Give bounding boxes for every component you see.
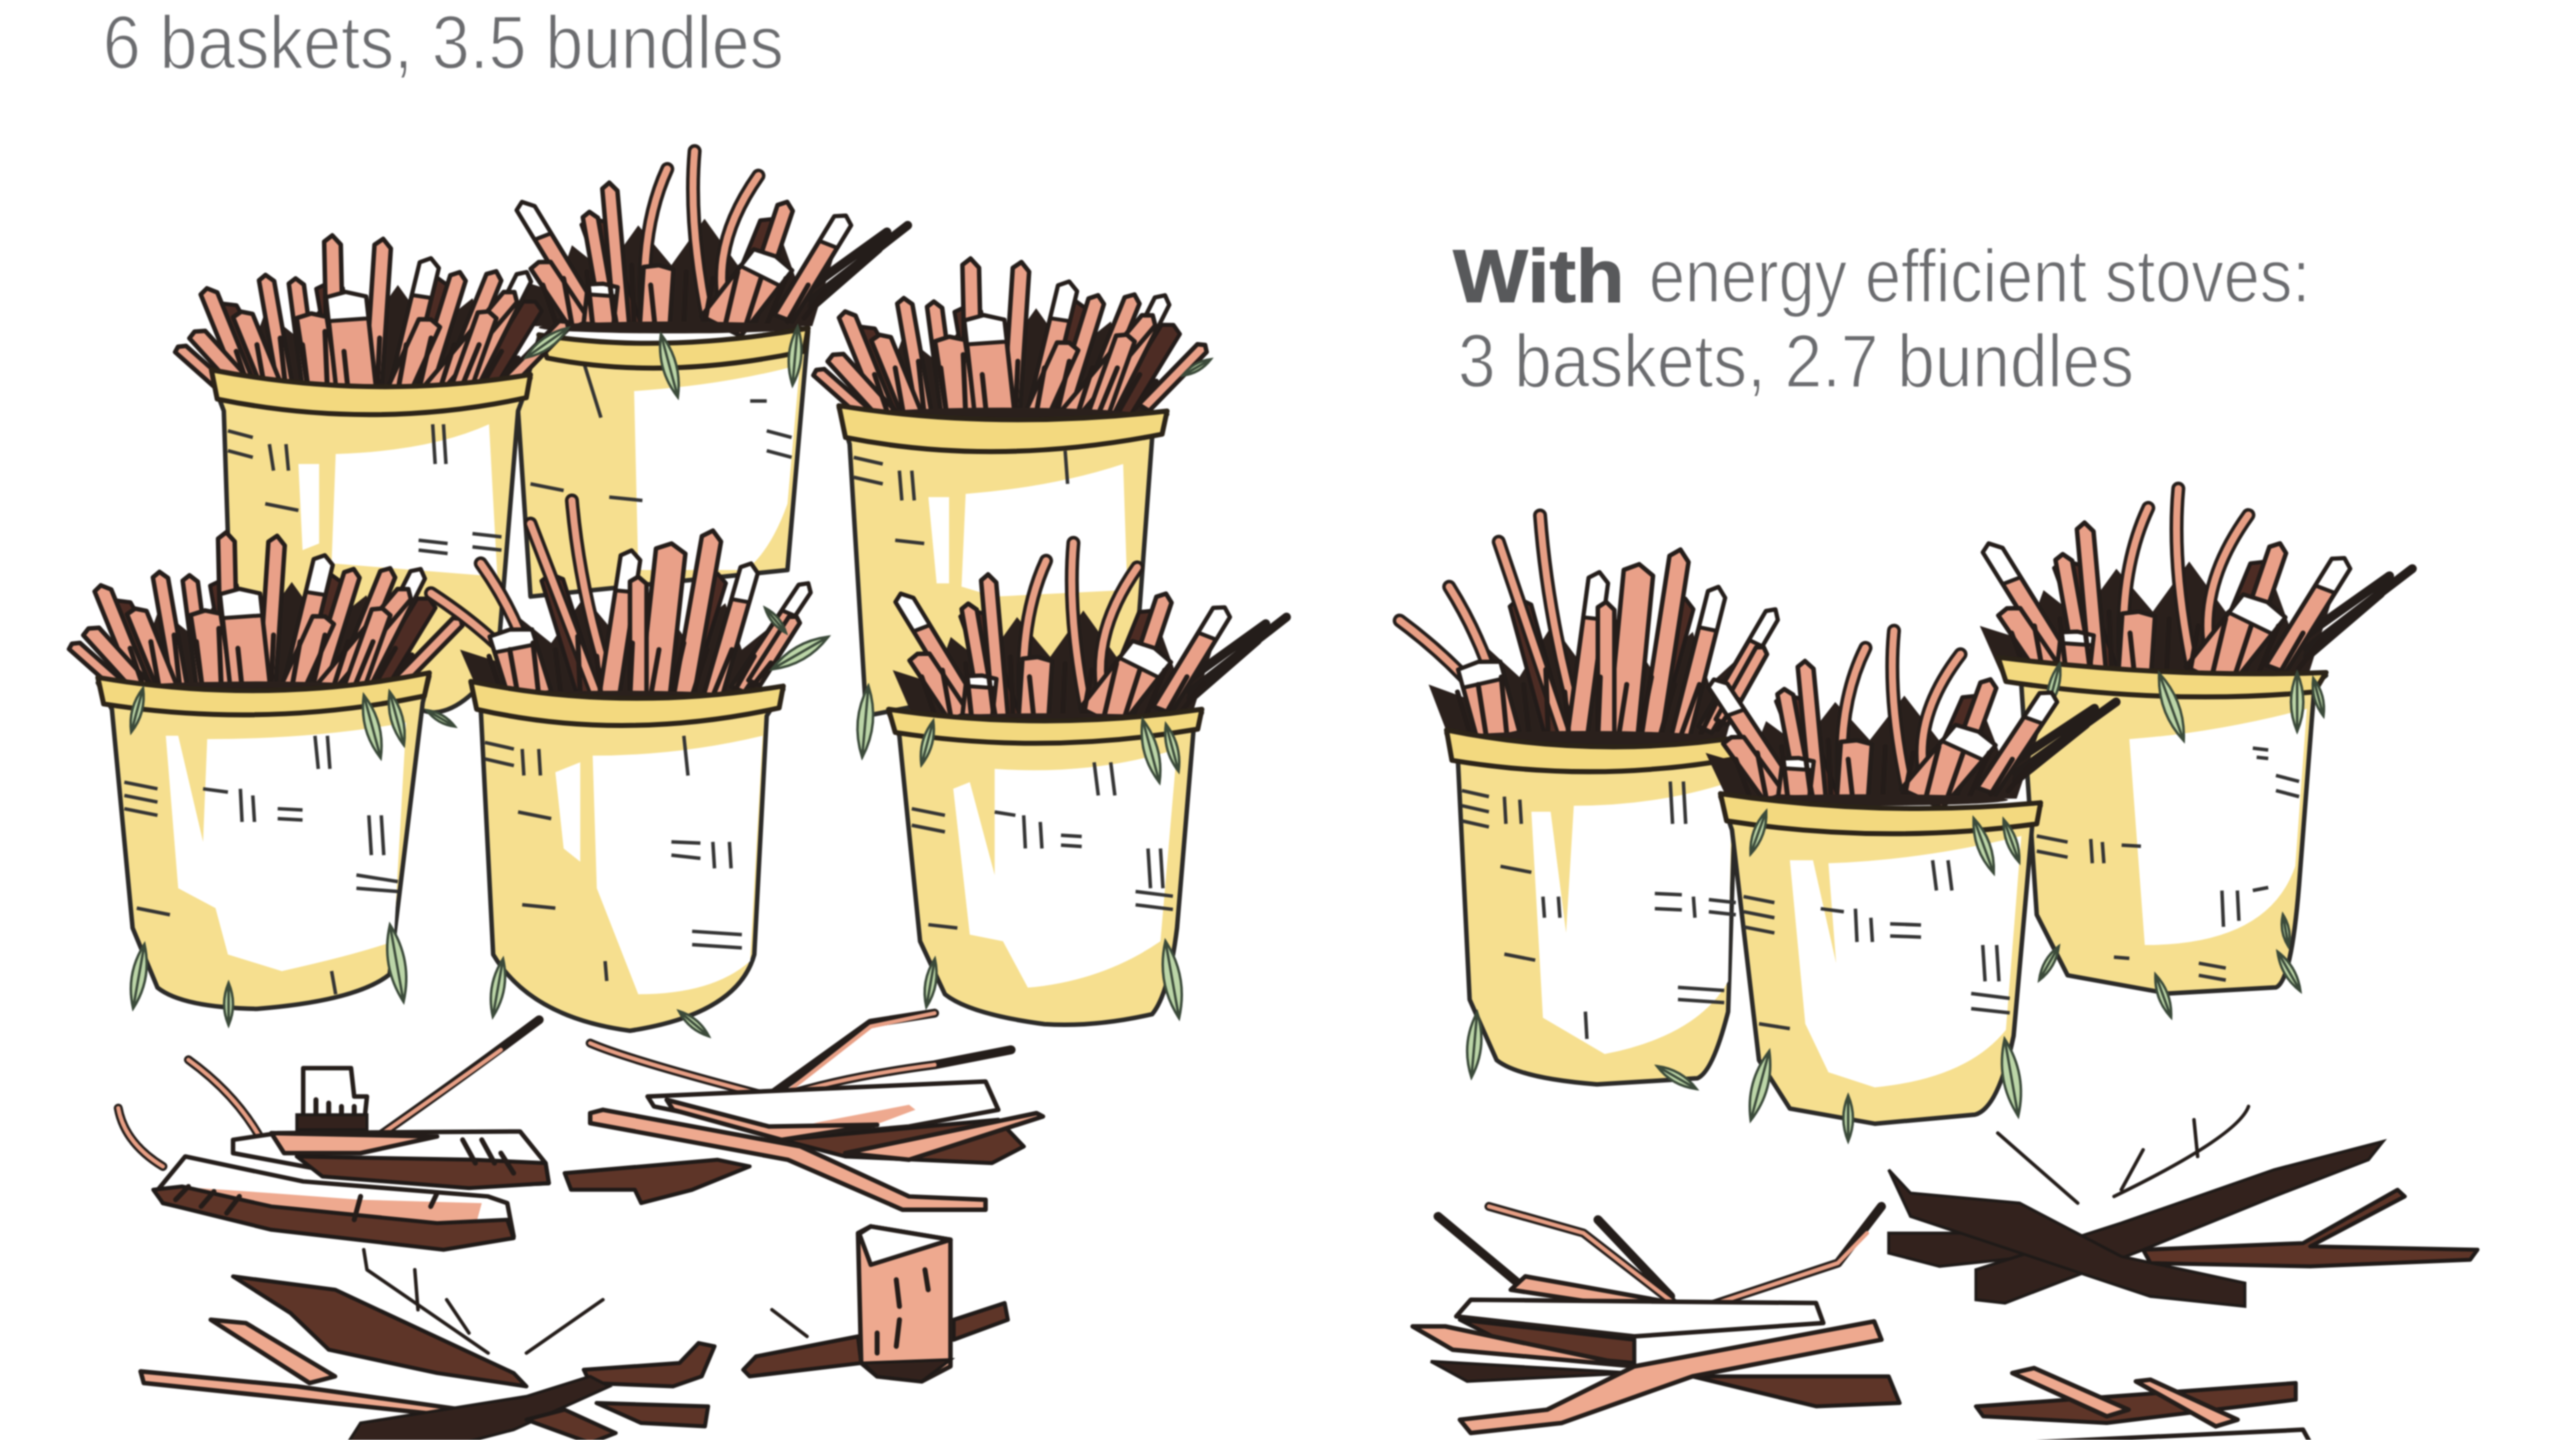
leaves: back right <box>2036 662 2327 1019</box>
basket: front left <box>67 532 466 1009</box>
basket: front centre <box>1705 631 2116 1124</box>
bundle: single split log with stick <box>743 1226 1008 1381</box>
bundle: crossed sticks on split log <box>565 1013 1043 1210</box>
bundle: dark crossed branches <box>141 1250 715 1440</box>
leaves: front left <box>126 687 457 1025</box>
basket: front left <box>1400 515 1782 1084</box>
leaf: back right <box>1181 356 1213 378</box>
basket: back right <box>811 258 1210 716</box>
bundle: partial sticks at bottom edge <box>1976 1368 2310 1440</box>
illustration: six baskets of firewood without efficient stoves <box>67 151 1286 1039</box>
text: right panel heading: energy efficient stoves: <box>1649 234 2310 318</box>
bundle: dark crossed branches <box>1889 1106 2477 1306</box>
leaf: back left <box>522 323 571 362</box>
leaves: front right <box>855 685 1187 1020</box>
basket: back centre <box>514 151 908 597</box>
leaves: front left <box>1465 1012 1699 1093</box>
text: right panel heading: 3 baskets, 2.7 bundles <box>1458 319 2134 403</box>
bundle: pale sticks on split log <box>1413 1206 1900 1433</box>
basket: front right <box>889 543 1286 1025</box>
illustration: three baskets of firewood with efficient stoves <box>1400 489 2412 1141</box>
basket: back right <box>1980 489 2412 993</box>
leaves: front centre <box>1743 810 2026 1141</box>
text: right panel heading: With <box>1453 234 1624 318</box>
text: left panel heading: 6 baskets, 3.5 bundles <box>103 1 784 85</box>
text: right panel heading <box>1453 234 2310 403</box>
leaf: back centre right <box>786 326 804 386</box>
basket: back left <box>173 235 572 713</box>
illustration: bundles, right <box>1413 1106 2477 1440</box>
illustration: three and a half bundles, left <box>118 1013 1043 1440</box>
bundle: logs with stump <box>118 1020 549 1250</box>
basket: front centre <box>431 500 815 1031</box>
leaf: back centre <box>654 332 684 399</box>
leaves: front centre <box>487 606 832 1039</box>
